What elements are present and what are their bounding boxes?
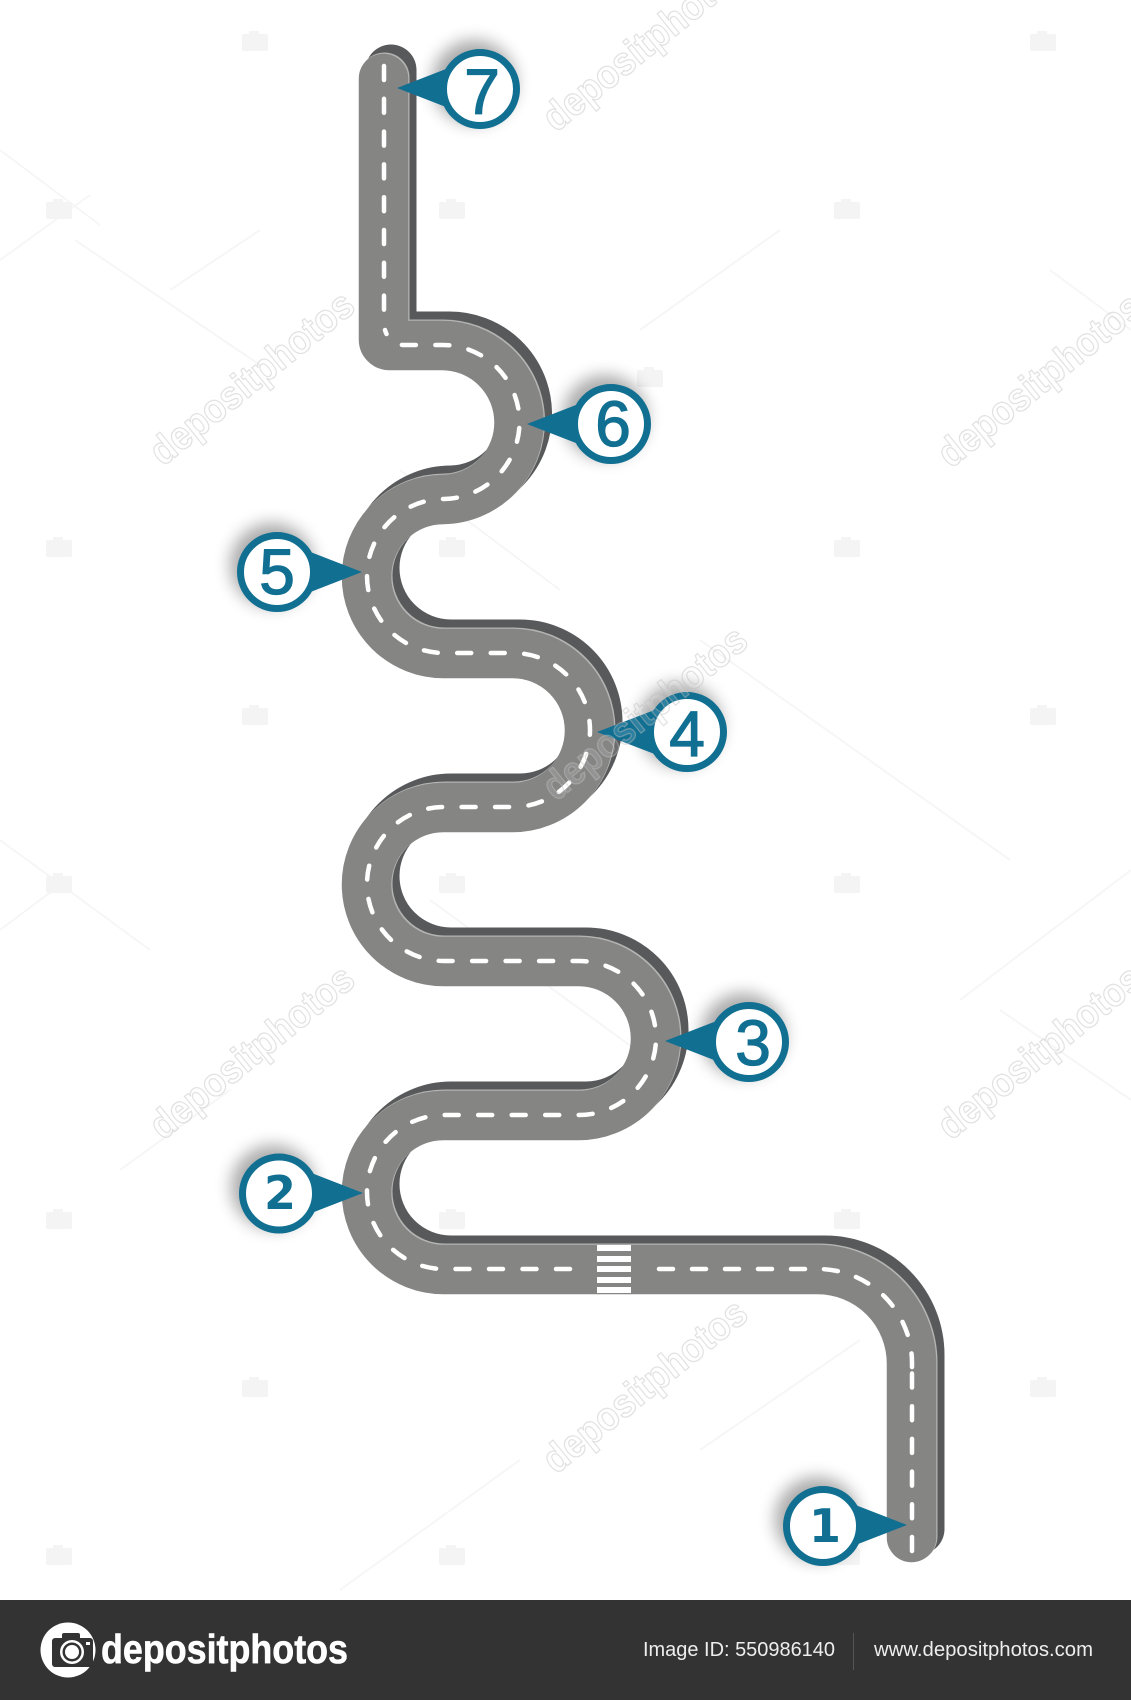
marker 1 (775, 1477, 907, 1562)
marker 3 (665, 993, 786, 1079)
marker 6: 6 (595, 388, 631, 460)
website: www.depositphotos.com (873, 1639, 1093, 1661)
marker 4: 4 (669, 698, 705, 770)
road (366, 66, 919, 1551)
watermark text: depositphotos (534, 1290, 756, 1482)
watermark text: depositphotos (534, 617, 756, 809)
road surface (366, 78, 912, 1538)
road light edge (368, 78, 912, 1536)
marker 3: 3 (735, 1007, 771, 1079)
marker 7: 7 (464, 56, 500, 128)
image id: Image ID: 550986140 (643, 1639, 835, 1661)
watermark text: depositphotos (141, 282, 363, 474)
footer bar (0, 1600, 1131, 1700)
marker 2 (231, 1145, 363, 1230)
marker 1: 1 (809, 1499, 841, 1553)
crosswalk (597, 1245, 631, 1293)
marker 5: 5 (259, 536, 295, 608)
marker 7 (397, 40, 516, 128)
marker 6 (527, 375, 648, 460)
marker 4 (597, 683, 724, 770)
road dark side (374, 70, 919, 1529)
watermark text: depositphotos (141, 956, 363, 1148)
marker 2: 2 (264, 1166, 296, 1220)
icon: camera logo (40, 1622, 96, 1678)
marker 5 (230, 523, 362, 608)
footer divider (853, 1633, 854, 1670)
lane dashes (367, 66, 912, 1551)
logo wordmark: depositphotos (101, 1626, 348, 1672)
watermark text (141, 0, 1131, 1482)
